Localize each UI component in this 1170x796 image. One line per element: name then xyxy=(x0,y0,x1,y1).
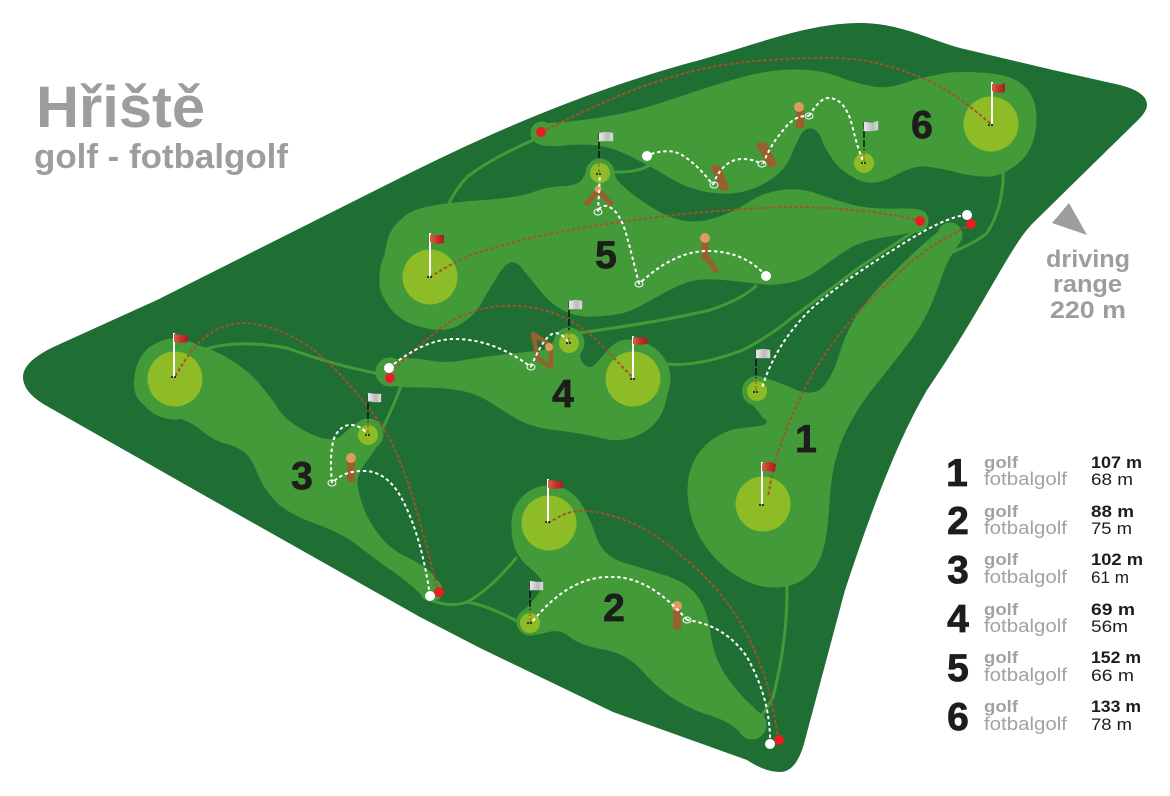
hole numbers: 4 xyxy=(552,373,574,416)
row 1: fotbalgolf xyxy=(984,469,1068,489)
row 4: 56m xyxy=(1091,617,1128,636)
landing rings xyxy=(328,113,813,623)
fairways xyxy=(134,70,1036,739)
footgolf tees xyxy=(384,151,972,749)
flag hole 6 footgolf xyxy=(861,121,878,163)
flag hole 3 footgolf xyxy=(365,393,381,435)
wooden obstacles xyxy=(346,102,804,629)
title: Hřiště xyxy=(36,75,205,140)
hole numbers xyxy=(291,104,933,630)
flag hole 4 footgolf xyxy=(566,300,582,343)
post hole 2 xyxy=(672,601,682,629)
row 3: golf xyxy=(984,550,1018,569)
row 4: golf xyxy=(984,600,1018,619)
fairway 2 xyxy=(512,488,764,738)
row 3: 102 m xyxy=(1091,550,1143,569)
row 2 xyxy=(947,500,1134,543)
flag hole 4 xyxy=(630,336,647,379)
silver footgolf flags xyxy=(365,121,878,623)
fairway 1 lobes xyxy=(742,223,962,406)
row 5: fotbalgolf xyxy=(984,665,1068,685)
row 5: golf xyxy=(984,648,1018,667)
flag hole 5 footgolf xyxy=(596,132,613,174)
row 6: 78 m xyxy=(1091,715,1132,734)
row 6: fotbalgolf xyxy=(984,714,1068,734)
hole numbers: 3 xyxy=(291,455,313,498)
title xyxy=(34,75,289,176)
row 6: golf xyxy=(984,697,1018,716)
flag hole 2 footgolf xyxy=(527,581,543,623)
driving range label: range xyxy=(1053,271,1122,298)
row 3: 61 m xyxy=(1091,568,1129,587)
row 6: 6 xyxy=(947,696,969,739)
golf tees xyxy=(385,127,976,745)
row 5: 5 xyxy=(947,647,969,690)
flag hole 3 xyxy=(171,333,188,377)
logs hole 5 xyxy=(586,186,717,272)
row 3: 3 xyxy=(947,549,969,592)
fairway 3 xyxy=(134,341,442,600)
post hole 3 xyxy=(346,453,356,482)
row 5: 66 m xyxy=(1091,666,1134,685)
driving range marker xyxy=(1046,203,1130,324)
row 4: fotbalgolf xyxy=(984,616,1068,636)
row 2: 75 m xyxy=(1091,519,1132,538)
driving range label: driving xyxy=(1046,246,1130,273)
row 2: 2 xyxy=(947,500,969,543)
row 5 xyxy=(947,647,1141,690)
fairway 5 lobes xyxy=(380,159,928,327)
row 1: 68 m xyxy=(1091,470,1133,489)
connector paths xyxy=(205,139,1003,718)
flag hole 6 xyxy=(988,82,1005,125)
driving range label xyxy=(1046,246,1130,324)
logs hole 6 xyxy=(713,102,804,190)
row 3: fotbalgolf xyxy=(984,567,1068,587)
tee lobe 6 xyxy=(531,122,553,144)
row 4: 4 xyxy=(947,598,969,641)
hole numbers: 1 xyxy=(795,418,817,461)
hole numbers: 2 xyxy=(603,587,625,630)
fairway 3 lobes xyxy=(135,339,442,601)
fairway 6 xyxy=(531,70,1036,193)
logs hole 4 xyxy=(533,334,553,367)
row 2: fotbalgolf xyxy=(984,518,1068,538)
flag hole 2 xyxy=(545,479,563,522)
row 1: 1 xyxy=(946,452,968,495)
row 6: 133 m xyxy=(1091,697,1141,716)
fairway 1 xyxy=(688,225,960,587)
row 4 xyxy=(947,598,1135,641)
hole numbers: 6 xyxy=(911,104,933,147)
row 6 xyxy=(947,696,1141,739)
arrow triangle xyxy=(1052,203,1087,235)
fairway 5 xyxy=(380,163,927,329)
row 3 xyxy=(947,549,1143,592)
row 1 xyxy=(946,452,1142,495)
row 2: 88 m xyxy=(1091,502,1134,521)
red golf flight lines xyxy=(175,58,991,740)
flag hole 1 footgolf xyxy=(753,349,770,392)
flag hole 1 xyxy=(759,462,776,505)
subtitle: golf - fotbalgolf xyxy=(34,138,289,176)
row 4: 69 m xyxy=(1091,600,1135,619)
greens xyxy=(148,96,1018,633)
driving range label: 220 m xyxy=(1050,297,1126,324)
hole numbers: 5 xyxy=(595,234,617,277)
red golf flags xyxy=(171,82,1005,522)
fairway 2 lobes xyxy=(512,486,766,739)
row 1: golf xyxy=(984,453,1018,472)
distance legend xyxy=(946,452,1143,739)
row 5: 152 m xyxy=(1091,648,1141,667)
fairway 4 lobes xyxy=(376,328,670,416)
white footgolf flight lines xyxy=(331,98,967,744)
row 1: 107 m xyxy=(1091,453,1142,472)
fairway 4 xyxy=(379,329,668,440)
flag hole 5 xyxy=(427,233,444,277)
row 2: golf xyxy=(984,502,1018,521)
